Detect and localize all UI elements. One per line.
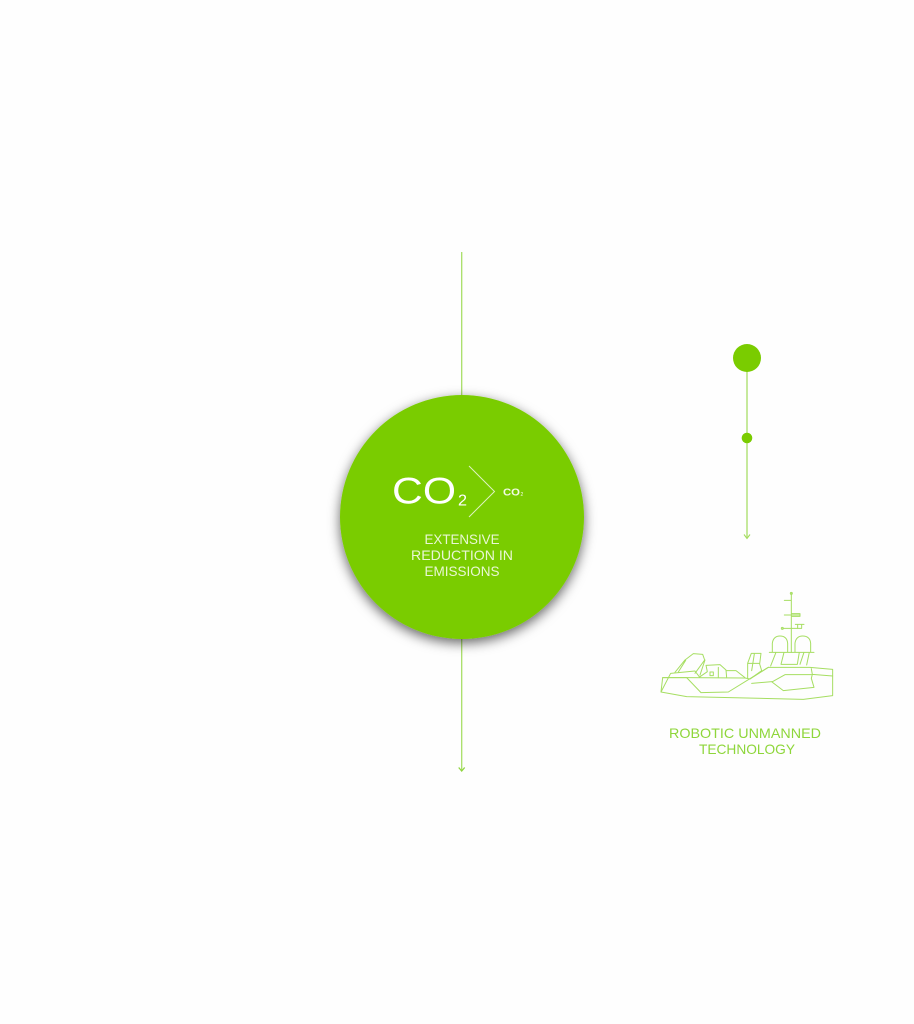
icon: chevron reduction arrow [469,466,494,517]
small dot [742,433,752,443]
panel: green emissions circle [340,395,584,639]
text: extensive reduction in emissions: EMISSIONS [424,563,500,579]
bridge [769,652,814,666]
large dot [733,344,761,372]
text: robotic unmanned technology: TECHNOLOGY [699,741,796,757]
hull [661,667,833,699]
text: robotic unmanned technology: ROBOTIC UNMANNED [669,725,821,741]
text: extensive reduction in emissions: REDUCTION IN [411,547,513,563]
central vertical arrow [459,252,465,771]
text: extensive reduction in emissions: EXTENSIVE [424,531,500,547]
mast [783,593,804,652]
large subscript 2: 2 [458,492,467,510]
icon: robotic unmanned vessel [661,592,833,699]
text: extensive reduction in emissions [411,531,513,579]
icon: large CO2: CO [392,470,456,512]
right timeline with dots and arrow [733,344,761,538]
small subscript 2: 2 [520,492,524,498]
radar domes [772,636,788,652]
bow seats [675,654,705,675]
small CO2: CO [503,486,520,498]
text: robotic unmanned technology [669,725,821,757]
